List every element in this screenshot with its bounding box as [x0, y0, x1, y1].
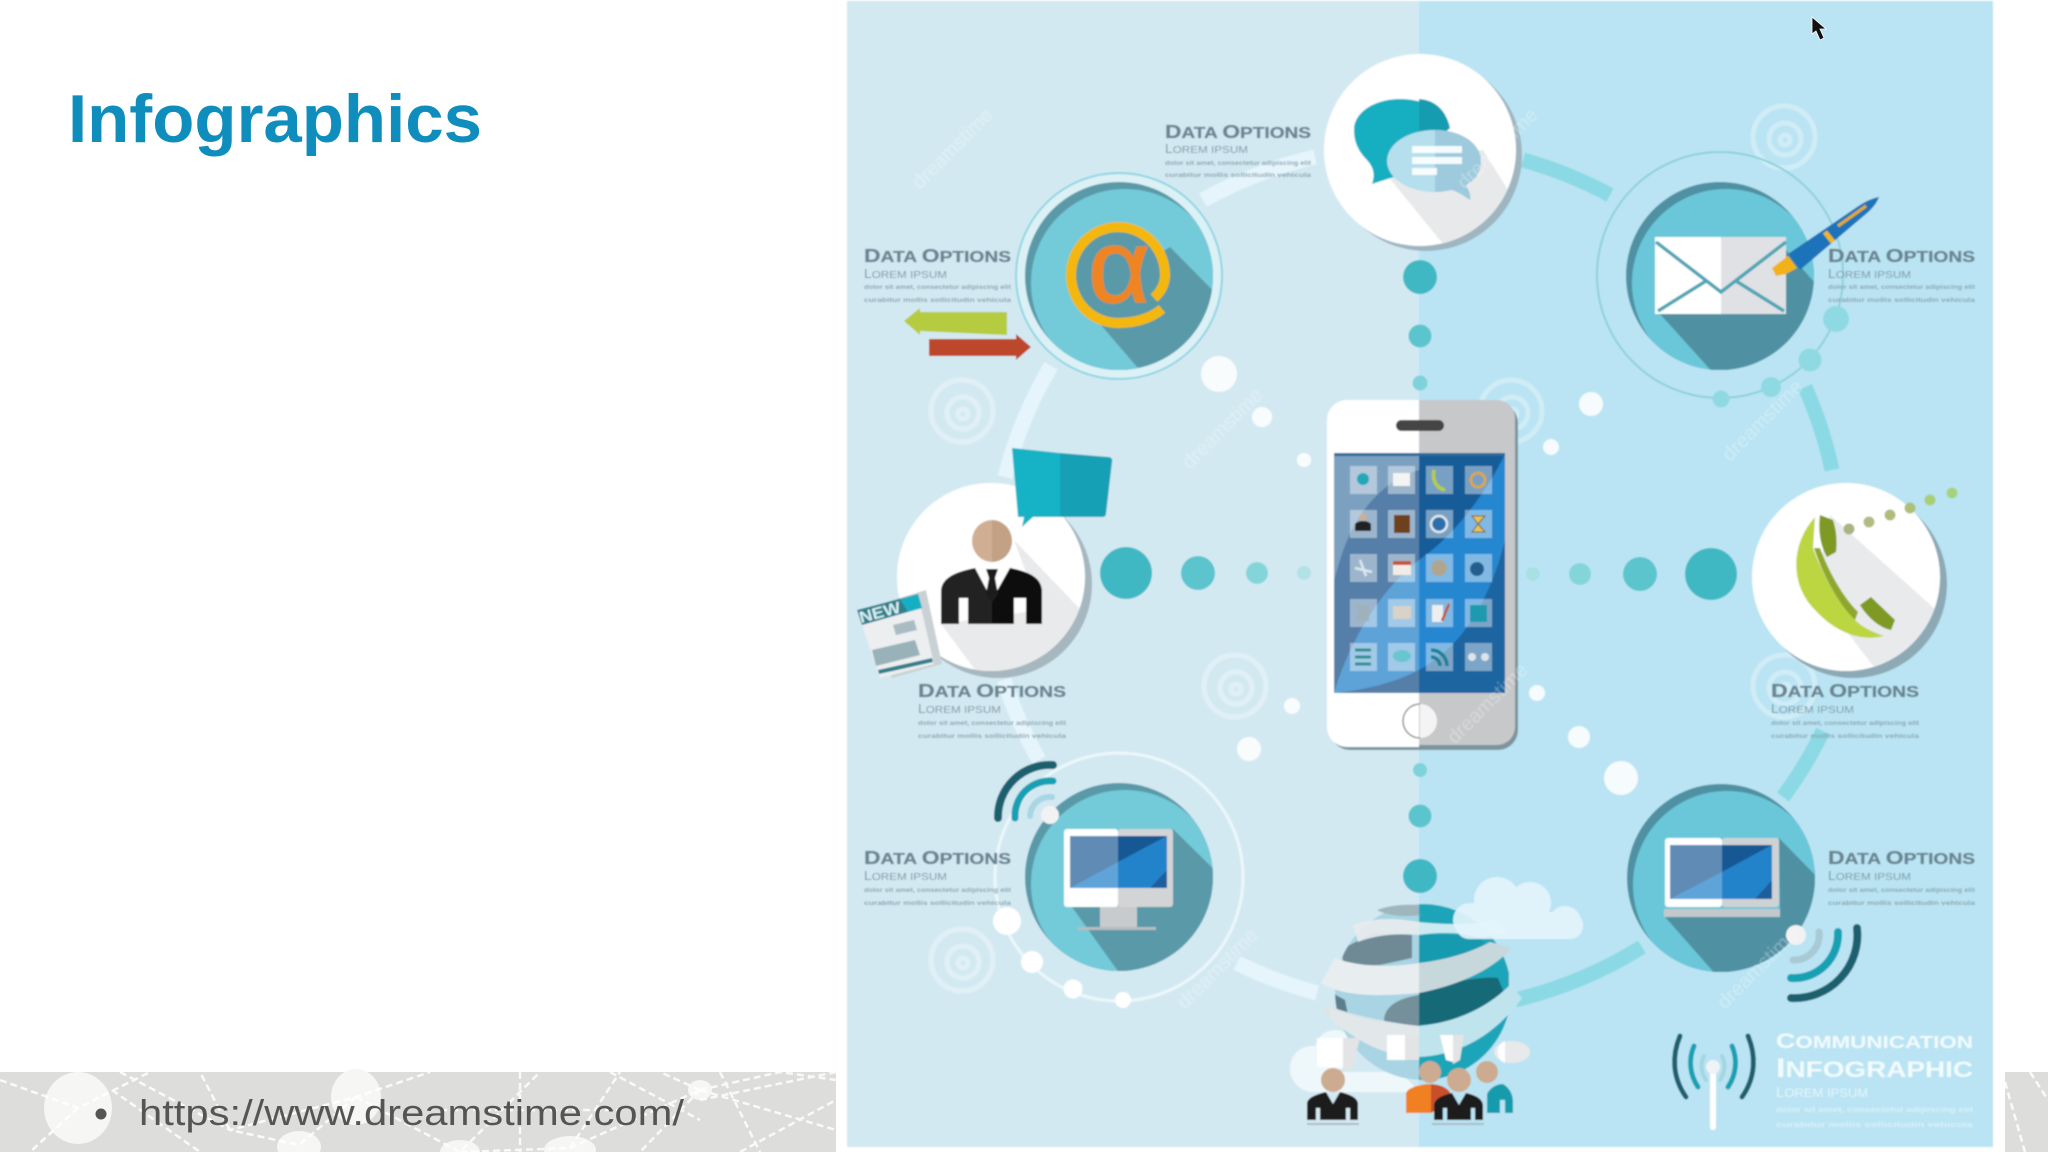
person: orange — [1406, 1061, 1452, 1113]
label: data options, telephone — [1771, 680, 1920, 740]
label: data options, monitor — [864, 847, 1012, 907]
phone illustration — [1327, 400, 1518, 750]
label: data options, chat: LOREM IPSUM — [1165, 142, 1248, 156]
watermark text: dreamstime — [1453, 104, 1542, 194]
heading: communication infographic: INFOGRAPHIC — [1776, 1053, 1973, 1083]
label: data options, laptop: DATA OPTIONS — [1828, 847, 1975, 868]
arrows: green and red — [904, 308, 1031, 360]
label: data options, person: DATA OPTIONS — [918, 680, 1066, 701]
connector dots — [1100, 260, 1737, 893]
heading: communication infographic: LOREM IPSUM — [1776, 1085, 1868, 1100]
footer band: decorative network pattern — [0, 1069, 2048, 1152]
icon: at sign — [1071, 209, 1165, 325]
watermark text: dreamstime — [1443, 659, 1532, 749]
app icon grid — [1350, 466, 1492, 671]
icon: newspaper — [857, 590, 942, 678]
label: data options, laptop: dolor sit amet, consectetur adipiscing elit — [1828, 887, 1976, 894]
label: data options, at-sign: dolor sit amet, consectetur adipiscing elit — [864, 284, 1012, 291]
bullet item: source link: https://www.dreamstime.com/ — [139, 1092, 684, 1133]
node: telephone — [1752, 483, 1958, 690]
icon: monitor — [1064, 829, 1173, 930]
label: data options, monitor: dolor sit amet, consectetur adipiscing elit — [864, 887, 1012, 894]
label: data options, chat: dolor sit amet, consectetur adipiscing elit — [1165, 160, 1312, 167]
watermark spirals — [931, 106, 1815, 991]
title: Infographics — [68, 81, 482, 157]
panel: communication infographic image — [847, 1, 1993, 1147]
cloud lower left — [1290, 1030, 1420, 1092]
label: data options, at-sign — [864, 245, 1012, 304]
icon: speech bubbles — [1354, 99, 1481, 200]
label: data options, laptop: LOREM IPSUM — [1828, 869, 1911, 883]
node: email at-sign — [1014, 172, 1224, 380]
watermark text: dreamstime — [1718, 376, 1807, 466]
watermark text: dreamstime — [1713, 924, 1802, 1014]
node: person — [857, 448, 1112, 690]
icon: wifi left — [998, 765, 1059, 824]
icon: handset — [1796, 515, 1895, 638]
cloud top right of globe — [1453, 877, 1583, 939]
node: envelope — [1597, 152, 1879, 408]
heading: communication infographic: dolor sit amet, consectetur adipiscing elit — [1776, 1107, 1974, 1114]
label: data options, telephone: LOREM IPSUM — [1771, 702, 1854, 716]
speech bubbles — [1317, 1035, 1530, 1070]
label: data options, chat: curabitur mollis sollicitudin vehicula — [1165, 172, 1311, 179]
label: data options, envelope: curabitur mollis sollicitudin vehicula — [1828, 297, 1975, 304]
heading: communication infographic — [1776, 1030, 1974, 1129]
node: desktop monitor — [993, 753, 1243, 1008]
node: chat — [1324, 54, 1530, 251]
person: teal — [1476, 1061, 1513, 1113]
phone screen — [1334, 453, 1505, 693]
label: data options, at-sign: LOREM IPSUM — [864, 267, 947, 281]
heading: communication infographic: curabitur mollis sollicitudin vehicula — [1776, 1122, 1973, 1129]
icon: mouse cursor — [1812, 17, 1826, 40]
label: data options, telephone: DATA OPTIONS — [1771, 680, 1919, 701]
label: data options, monitor: LOREM IPSUM — [864, 869, 947, 883]
label: data options, laptop — [1828, 847, 1976, 907]
icon: speech box — [1012, 448, 1112, 527]
globe — [1321, 904, 1522, 1080]
icon: at sign: α — [1088, 209, 1150, 325]
globe bands — [1321, 905, 1522, 1057]
ring arcs connecting the nodes — [1004, 157, 1832, 1000]
icon: wifi right — [1786, 925, 1857, 998]
label: data options, person — [918, 680, 1067, 740]
label: data options, telephone: curabitur mollis sollicitudin vehicula — [1771, 733, 1919, 740]
icon: businessman — [941, 520, 1042, 624]
watermark text: dreamstime — [908, 104, 997, 194]
icon: newspaper: NEW — [858, 599, 904, 627]
watermark text — [908, 104, 1807, 1014]
label: data options, person: curabitur mollis sollicitudin vehicula — [918, 733, 1066, 740]
label: data options, laptop: curabitur mollis sollicitudin vehicula — [1828, 900, 1975, 907]
heading: communication infographic: COMMUNICATION — [1776, 1030, 1973, 1053]
label: data options, monitor: curabitur mollis sollicitudin vehicula — [864, 900, 1011, 907]
label: data options, chat — [1165, 121, 1312, 179]
label: data options, telephone: dolor sit amet, consectetur adipiscing elit — [1771, 720, 1920, 727]
people with speech bubbles — [1307, 1035, 1530, 1125]
icon: laptop — [1664, 838, 1780, 917]
icon: envelope — [1655, 237, 1786, 314]
icon: antenna — [1675, 1036, 1753, 1127]
scattered white dots — [1201, 356, 1638, 795]
label: data options, person: dolor sit amet, consectetur adipiscing elit — [918, 720, 1067, 727]
trail of dots — [1844, 488, 1958, 534]
label: data options, envelope — [1828, 245, 1976, 304]
label: data options, at-sign: DATA OPTIONS — [864, 245, 1011, 266]
icon: fountain pen — [1772, 197, 1879, 276]
watermark text: dreamstime — [1178, 384, 1267, 474]
person: centre — [1432, 1068, 1484, 1125]
label: data options, at-sign: curabitur mollis sollicitudin vehicula — [864, 297, 1011, 304]
label: data options, envelope: DATA OPTIONS — [1828, 245, 1975, 266]
watermark text: dreamstime — [1173, 924, 1262, 1014]
label: data options, chat: DATA OPTIONS — [1165, 121, 1311, 142]
label: data options, person: LOREM IPSUM — [918, 702, 1001, 716]
person: left — [1307, 1068, 1359, 1125]
label: data options, envelope: LOREM IPSUM — [1828, 267, 1911, 281]
label: data options, envelope: dolor sit amet, consectetur adipiscing elit — [1828, 284, 1976, 291]
node: laptop — [1626, 783, 1816, 973]
label: data options, monitor: DATA OPTIONS — [864, 847, 1011, 868]
home button — [1403, 704, 1437, 738]
